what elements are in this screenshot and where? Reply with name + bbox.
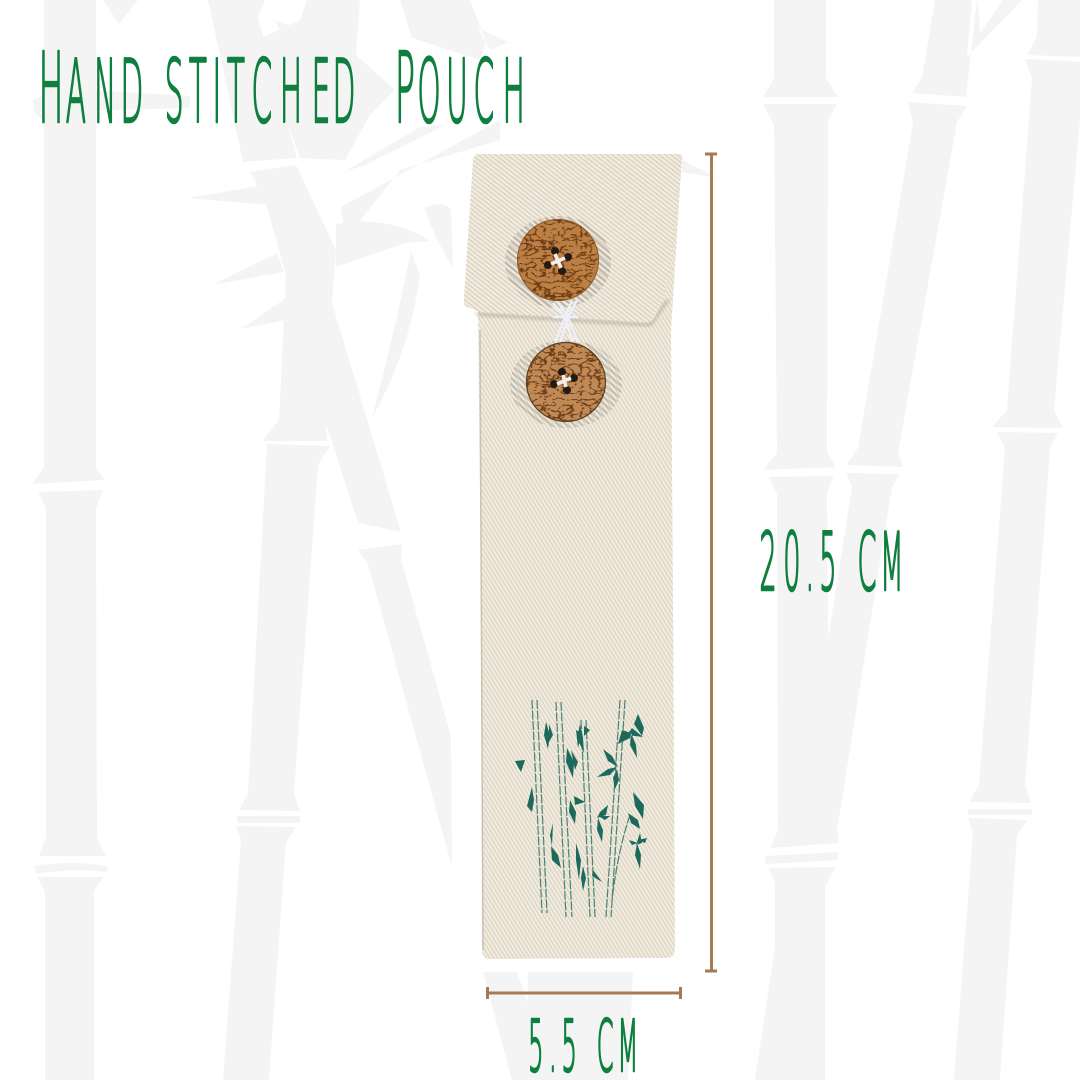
stalk: right vertical xyxy=(755,0,839,1080)
lower coconut button xyxy=(526,342,606,422)
shadow: upper button xyxy=(505,216,611,308)
stalk: diagonal xyxy=(324,303,452,867)
print stems xyxy=(532,700,630,917)
pouch flap shadow xyxy=(476,300,668,325)
upper coconut button xyxy=(517,219,599,301)
bamboo print xyxy=(515,700,647,917)
title: HAND STITCHED POUCH xyxy=(39,34,525,146)
pouch left edge shading xyxy=(480,330,483,950)
print leaves xyxy=(515,714,647,891)
elastic loop xyxy=(553,300,578,343)
pouch body xyxy=(478,155,682,959)
leaves: centre cluster xyxy=(33,0,718,418)
shadow: lower button xyxy=(510,340,622,428)
stalk: far left xyxy=(32,0,107,1080)
stalk: far right xyxy=(954,0,1080,1080)
pouch xyxy=(464,154,682,959)
pouch flap xyxy=(464,154,682,322)
stalk: right slanted xyxy=(828,0,1022,830)
height dimension line xyxy=(705,154,717,971)
width dimension line xyxy=(487,987,681,999)
height label: 20.5 CM xyxy=(759,518,904,610)
stalk: bottom centre xyxy=(483,972,633,1080)
stalk: centre-left xyxy=(208,0,336,1080)
